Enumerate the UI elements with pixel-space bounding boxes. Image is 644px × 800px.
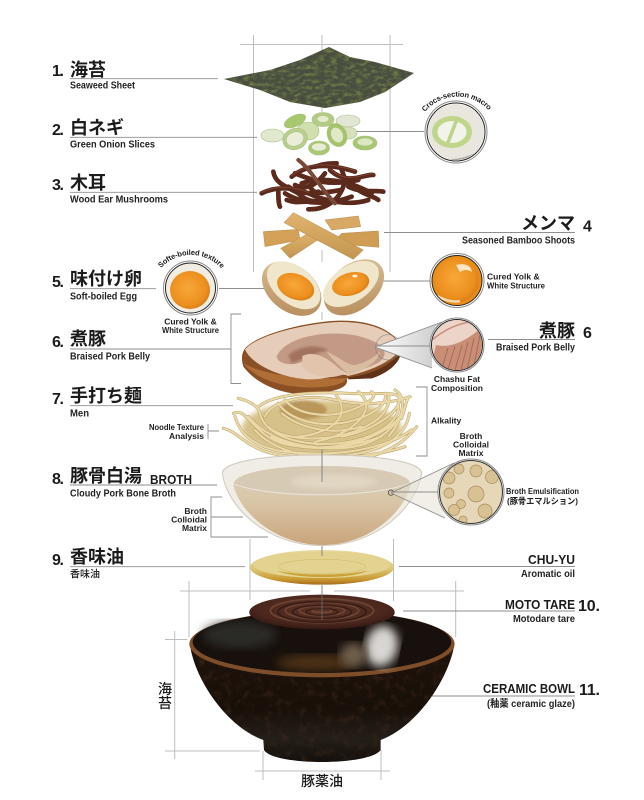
layer 11: dark ceramic bowl bbox=[189, 595, 455, 762]
label 6 right: pork: 煮豚 bbox=[539, 321, 575, 341]
label 10: moto tare: Motodare tare bbox=[513, 614, 575, 625]
center axis overlay bbox=[321, 450, 323, 620]
label 2: green onion: 白ネギ bbox=[70, 118, 124, 138]
caption: broth emulsification: (豚骨エマルション) bbox=[507, 496, 578, 506]
dimension label: vertical: 苔 bbox=[158, 695, 172, 711]
caption: broth colloidal matrix left: Matrix bbox=[182, 523, 207, 533]
label 6 right: pork: Braised Pork Belly bbox=[496, 342, 575, 354]
label 8: broth: BROTH bbox=[150, 472, 192, 487]
label 6 right: pork: 6 bbox=[583, 325, 592, 342]
label 2: green onion: Green Onion Slices bbox=[70, 140, 155, 150]
caption: broth colloidal matrix right: Broth bbox=[460, 431, 482, 441]
caption: broth colloidal matrix right: Matrix bbox=[458, 448, 484, 458]
layer 10: moto tare disc bbox=[249, 595, 395, 630]
leader lines bbox=[70, 79, 575, 696]
tare disc over rim bbox=[249, 595, 395, 629]
caption: cured yolk left: White Structure bbox=[162, 325, 219, 335]
label 10: moto tare bbox=[505, 597, 600, 625]
layer 2: green onion slices bbox=[261, 111, 377, 155]
label 4: bamboo shoots bbox=[462, 214, 592, 246]
caption: broth colloidal matrix left: Broth bbox=[184, 506, 207, 516]
layer 1: nori seaweed sheet bbox=[224, 47, 414, 108]
label 1: seaweed sheet: 海苔 bbox=[70, 60, 106, 80]
label 4: bamboo shoots: 4 bbox=[583, 218, 592, 236]
label 7: noodles: 7. bbox=[52, 391, 64, 408]
label 4: bamboo shoots: メンマ bbox=[521, 214, 575, 234]
label: chu-yu bbox=[521, 552, 575, 580]
label 6: pork: 煮豚 bbox=[70, 329, 106, 349]
bowl rim bbox=[189, 611, 455, 677]
macro: chashu callout bbox=[375, 318, 484, 372]
layer 3: wood ear mushrooms bbox=[262, 160, 383, 209]
left egg half bbox=[251, 250, 332, 327]
caption: broth colloidal matrix left: Colloidal bbox=[171, 514, 207, 524]
construction guide lines bbox=[165, 35, 464, 780]
layer 8: glass bowl of tonkotsu broth bbox=[222, 455, 422, 546]
caption: cured yolk right: White Structure bbox=[487, 280, 545, 290]
dimension label: vertical: 海 bbox=[158, 681, 172, 697]
label 3: wood ear bbox=[52, 173, 168, 206]
label 1: seaweed sheet: Seaweed Sheet bbox=[70, 80, 136, 92]
label 1: seaweed sheet: 1. bbox=[52, 63, 64, 80]
caption: Crocs-section macro bbox=[422, 91, 490, 111]
label 11: ceramic bowl: (釉薬 ceramic glaze) bbox=[487, 697, 575, 710]
label 7: noodles: Men bbox=[70, 408, 89, 420]
macro: onion cross-section bbox=[422, 91, 490, 164]
caption: broth colloidal matrix right bbox=[453, 431, 489, 458]
layer 6: chashu braised pork belly bbox=[242, 321, 402, 394]
label 3: wood ear: 木耳 bbox=[70, 173, 106, 193]
label 5: egg: Soft-boiled Egg bbox=[70, 292, 137, 302]
caption: noodle texture bbox=[149, 422, 204, 441]
right egg half bbox=[313, 248, 395, 327]
label 9: aromatic oil: 香味油 bbox=[70, 547, 124, 567]
label 2: green onion bbox=[52, 118, 155, 150]
layer 4: menma bamboo shoots bbox=[263, 213, 379, 259]
caption: cured yolk left: Cured Yolk & bbox=[164, 316, 217, 326]
macro: broth emulsification callout bbox=[391, 459, 504, 525]
label 1: seaweed sheet bbox=[52, 60, 136, 92]
label 11: ceramic bowl: 11. bbox=[579, 682, 600, 699]
caption: broth emulsification: Broth Emulsification bbox=[506, 486, 579, 496]
label 7: noodles: 手打ち麺 bbox=[70, 386, 142, 406]
dimension label: bottom: 豚薬油 bbox=[301, 773, 343, 789]
label 6 right: pork bbox=[496, 321, 592, 354]
caption: broth emulsification bbox=[506, 486, 579, 506]
label: chu-yu: CHU-YU bbox=[528, 552, 575, 567]
label 9: aromatic oil bbox=[52, 547, 124, 580]
label 8: broth: 8. bbox=[52, 471, 64, 488]
label: chu-yu: Aromatic oil bbox=[521, 569, 575, 580]
caption: chashu fat: Composition bbox=[431, 383, 483, 393]
label 5: egg: 味付け卵 bbox=[70, 269, 142, 289]
label 9: aromatic oil: 香味油 bbox=[70, 568, 100, 580]
bowl interior bbox=[193, 611, 451, 673]
caption: noodle texture: Noodle Texture bbox=[149, 422, 204, 432]
label 9: aromatic oil: 9. bbox=[52, 552, 64, 569]
caption: cured yolk left bbox=[162, 316, 219, 335]
caption: cured yolk right bbox=[487, 272, 545, 290]
caption: broth colloidal matrix right: Colloidal bbox=[453, 440, 489, 450]
caption: cured yolk right: Cured Yolk & bbox=[487, 272, 540, 282]
label 2: green onion: 2. bbox=[52, 122, 64, 139]
label 10: moto tare: 10. bbox=[578, 598, 600, 615]
label 4: bamboo shoots: Seasoned Bamboo Shoots bbox=[462, 236, 575, 246]
caption: Softe-boiled texture bbox=[158, 250, 224, 268]
label 8: broth bbox=[52, 466, 192, 500]
label 8: broth: 豚骨白湯 bbox=[70, 466, 142, 486]
label 8: broth: Cloudy Pork Bone Broth bbox=[70, 488, 176, 500]
label 3: wood ear: 3. bbox=[52, 177, 64, 194]
label 3: wood ear: Wood Ear Mushrooms bbox=[70, 194, 168, 206]
caption: chashu fat bbox=[431, 374, 483, 393]
label 11: ceramic bowl: CERAMIC BOWL bbox=[483, 681, 575, 696]
layer 9: aromatic oil disc bbox=[250, 550, 394, 585]
layer 7: noodles bbox=[223, 390, 417, 464]
dimension label: vertical bbox=[158, 681, 172, 711]
caption: broth colloidal matrix left bbox=[171, 506, 207, 533]
bowl body bbox=[190, 645, 454, 762]
label 7: noodles bbox=[52, 386, 142, 420]
caption: noodle texture: Analysis bbox=[169, 431, 204, 441]
label 6: pork: 6. bbox=[52, 334, 64, 351]
label 6: pork: Braised Pork Belly bbox=[70, 352, 150, 362]
label 6: pork bbox=[52, 329, 150, 362]
label 5: egg: 5. bbox=[52, 274, 64, 291]
label 10: moto tare: MOTO TARE bbox=[505, 597, 575, 612]
label 5: egg bbox=[52, 269, 142, 302]
macro: egg texture bbox=[158, 250, 224, 316]
macro: cured yolk bbox=[430, 254, 484, 308]
layer 5: halved soft-boiled egg bbox=[251, 248, 395, 327]
caption: alkality: Alkality bbox=[431, 416, 462, 426]
label 11: ceramic bowl bbox=[483, 681, 600, 710]
caption: chashu fat: Chashu Fat bbox=[434, 374, 480, 384]
